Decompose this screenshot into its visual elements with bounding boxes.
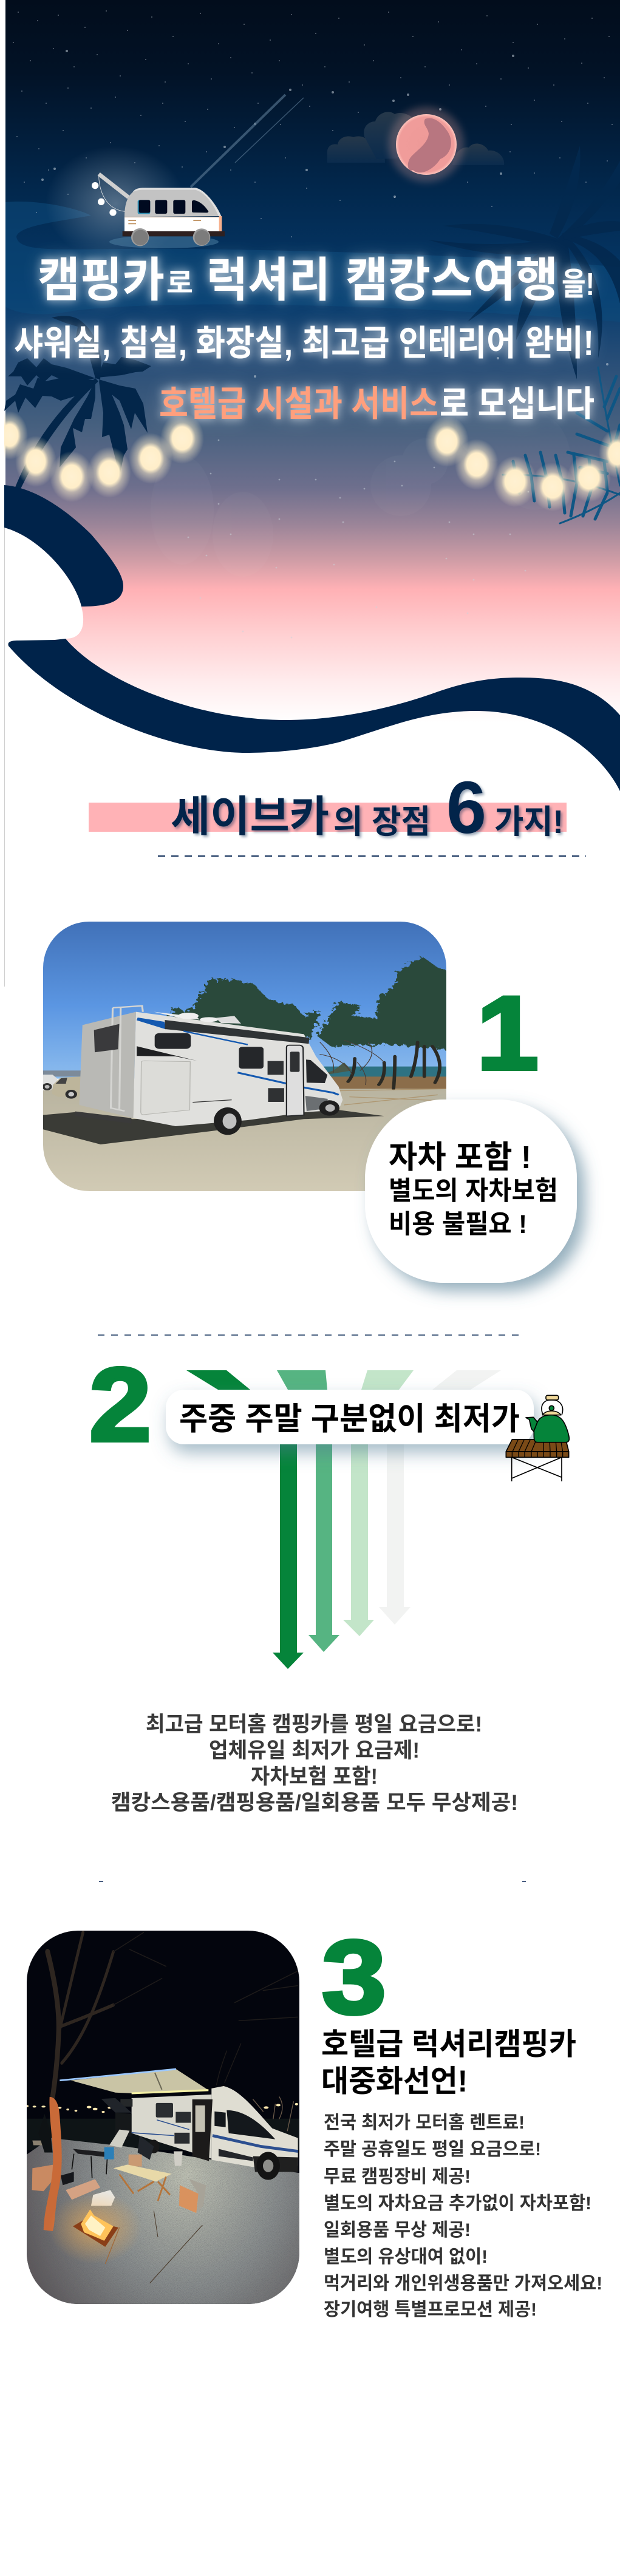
number 1: 1	[477, 975, 539, 1092]
gravel	[24, 2138, 308, 2314]
number 2: 2	[89, 1347, 151, 1463]
text block: included services list: 일회용품 무상 제공!	[324, 2220, 471, 2240]
string lights	[0, 411, 620, 511]
text block: included services list: 장기여행 특별프로모션 제공!	[324, 2300, 537, 2320]
headline: camping car luxury trip: 캠핑카	[38, 253, 165, 307]
wave: upper navy band	[4, 485, 123, 607]
headline: camping car luxury trip: 로	[166, 267, 193, 299]
van rear body	[132, 2095, 211, 2158]
photo: motorhome by the pine trees	[36, 917, 465, 1194]
callout: insurance included: 비용 불필요 !	[389, 1210, 527, 1239]
heading: hotel-grade luxury camping car: 대중화선언!	[321, 2064, 468, 2098]
chart: four descending price arrows	[186, 1370, 501, 1669]
awning	[71, 2069, 208, 2093]
heading: hotel-grade luxury camping car	[321, 2027, 576, 2098]
heading: six advantages	[89, 766, 567, 849]
van cab	[211, 2086, 298, 2167]
wave: lower navy band	[9, 639, 620, 791]
wave: white underlay	[5, 639, 83, 705]
subheadline: hotel-grade service: 로 모십니다	[440, 384, 594, 424]
panel: advantage 1	[36, 917, 577, 1283]
heading: hotel-grade luxury camping car: 호텔급 럭셔리캠핑카	[321, 2027, 576, 2061]
text block: included services list: 무료 캠핑장비 제공!	[324, 2167, 471, 2187]
panel: night sky hero	[0, 0, 620, 862]
callout: insurance included: 별도의 자차보험	[389, 1177, 558, 1206]
motorhome body	[133, 1012, 342, 1126]
shadow	[43, 1110, 384, 1144]
icon: kettle on camping table	[506, 1395, 569, 1481]
distant lights	[26, 2103, 298, 2113]
icon: camper van with lights	[92, 174, 225, 248]
parked cars	[43, 1075, 58, 1090]
text block: included services list: 주말 공휴일도 평일 요금으로!	[324, 2139, 541, 2160]
text block: price benefits: 자차보험 포함!	[251, 1765, 378, 1789]
photo: night campsite with awning and fire	[24, 1928, 308, 2314]
lighter hill band	[5, 202, 618, 300]
faint clouds in the dusk	[151, 389, 571, 577]
text block: price benefits	[111, 1713, 518, 1815]
tree trunk	[44, 2097, 62, 2231]
headline: camping car luxury trip	[38, 253, 594, 307]
headline: camping car luxury trip: 럭셔리	[206, 253, 330, 307]
callout pill: lowest price all week: 주중 주말 구분없이 최저가	[179, 1402, 520, 1437]
panel: advantage 3	[24, 1919, 602, 2320]
callout: insurance included	[365, 1099, 577, 1283]
right palm silhouette	[428, 146, 620, 379]
wave: white cut-out	[0, 526, 83, 641]
number 3: 3	[322, 1919, 386, 2036]
headline: camping car luxury trip: 을!	[562, 267, 594, 302]
icon: red moon	[389, 107, 464, 182]
camp furniture	[73, 2149, 111, 2157]
stars	[13, 11, 612, 637]
text block: price benefits: 캠캉스용품/캠핑용품/일회용품 모두 무상제공!	[111, 1791, 518, 1815]
panel: advantage 2	[89, 1347, 569, 1815]
text block: included services list: 별도의 유상대여 없이!	[324, 2247, 488, 2267]
branches	[47, 1932, 298, 2131]
icon: shooting stars	[191, 95, 304, 187]
left palm silhouette	[4, 316, 151, 489]
headline: camping car luxury trip: 캠캉스여행	[346, 253, 558, 307]
heading: six advantages: 6	[446, 766, 486, 849]
heading: six advantages: 세이브카	[171, 793, 329, 840]
right fern leaves	[503, 367, 620, 523]
heading: six advantages: 의 장점	[333, 804, 431, 840]
heading: six advantages: 가지!	[494, 804, 564, 840]
text block: included services list: 전국 최저가 모터홈 렌트료!	[324, 2113, 525, 2133]
text block: included services list	[324, 2113, 602, 2320]
subheadline: hotel-grade service: 호텔급 시설과 서비스	[159, 384, 438, 424]
text block: price benefits: 최고급 모터홈 캠핑카를 평일 요금으로!	[146, 1713, 482, 1736]
fire pit	[49, 2191, 141, 2264]
text block: included services list: 별도의 자차요금 추가없이 자차포함!	[324, 2194, 591, 2214]
callout: insurance included: 자차 포함 !	[389, 1140, 531, 1175]
text block: included services list: 먹거리와 개인위생용품만 가져오세요!	[324, 2274, 602, 2294]
text block: price benefits: 업체유일 최저가 요금제!	[209, 1739, 420, 1762]
icon: clouds behind moon	[327, 112, 504, 165]
callout pill: lowest price all week	[166, 1390, 534, 1444]
